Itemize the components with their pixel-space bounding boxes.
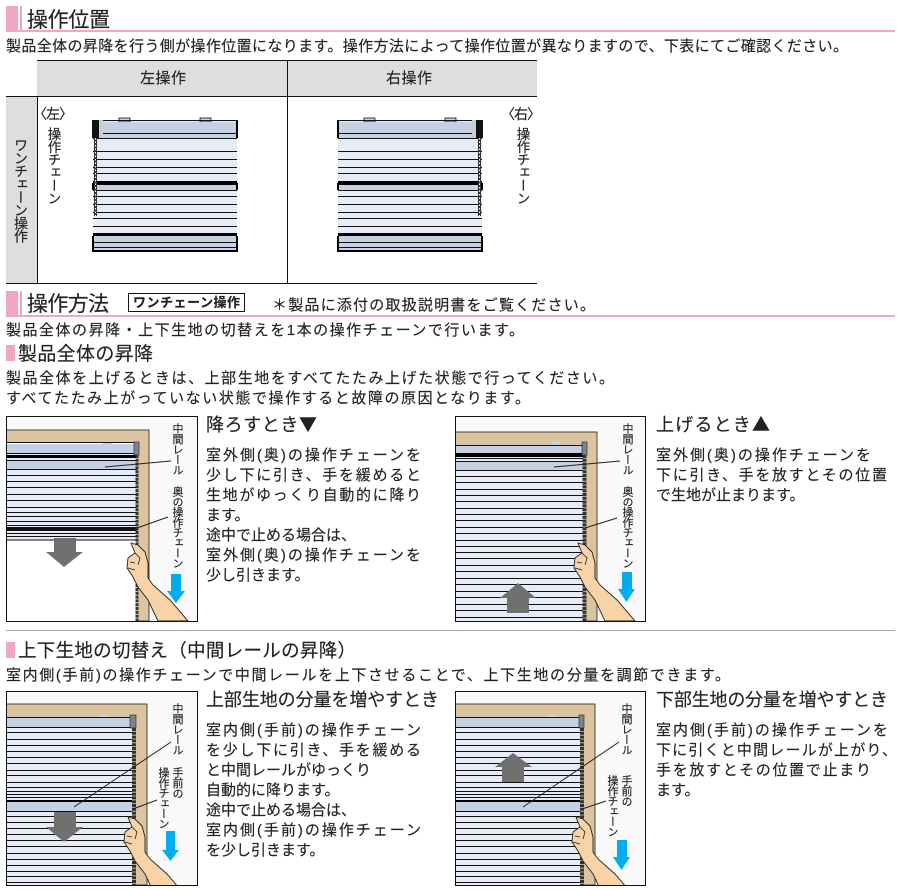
illustration: lowering [6,417,197,621]
subheading: 上下生地の切替え: 上下生地の切替え（中間レールの昇降） [18,640,356,661]
text block: raising: で生地が止まります。 [656,487,805,504]
illustration: increase lower fabric [456,703,632,885]
text: raising caution: すべてたたみ上がっていない状態で操作すると故障の原因となります。 [6,390,530,407]
table header: right: 右操作 [386,70,432,87]
text block: increase upper fabric: 上部生地の分量を増やすとき [206,690,439,710]
arrow: up gray [500,583,536,613]
text: raising caution [6,370,614,407]
illustration: raising [455,417,645,621]
text block: lowering: 生地がゆっくり自動的に降り [206,487,421,504]
hand [574,543,635,621]
text block: lowering: 途中で止める場合は、 [206,527,356,544]
text block: increase upper fabric [206,690,439,859]
text block: raising [656,411,887,504]
arrow: up gray [495,753,532,782]
text block: increase upper fabric: 自動的に降ります。 [206,782,340,799]
arrow: down gray [46,538,83,567]
arrow: down blue [162,831,179,861]
arrow: down gray [46,812,83,842]
label: rear chain: 奥の操作チェーン [621,485,634,568]
row label: one chain: ワンチェーン操作 [13,138,29,243]
heading: 操作位置: 操作位置 [27,9,110,32]
text block: increase upper fabric: 途中で止める場合は、 [206,802,356,819]
label: middle rail: 中間レール [171,423,184,475]
text: switching intro: 室内側(手前)の操作チェーンで中間レールを上下させることで、上下生地の分量を調節できます。 [6,667,730,684]
text block: increase lower fabric [656,690,897,799]
arrow: down blue [167,574,185,603]
text block: raising: 室外側(奥)の操作チェーンを [656,447,871,464]
diagram: left operated blind [92,118,238,252]
diagram: right operated blind [337,118,483,252]
table: operating position [6,60,540,284]
table header: left: 左操作 [140,70,186,87]
text block: increase upper fabric: と中間レールがゆっくり [206,762,371,779]
label: right chain: 操作チェーン [514,127,530,204]
text block: increase upper fabric: 室内側(手前)の操作チェーン [206,822,421,839]
label: middle rail: 中間レール [621,423,634,475]
label: middle rail: 中間レール [171,703,184,755]
badge: one chain operation: ワンチェーン操作 [133,295,240,310]
label: middle rail: 中間レール [620,703,632,755]
label: front: 手前の [171,766,184,798]
text block: lowering: ます。 [206,507,250,524]
label: rear chain: 奥の操作チェーン [171,485,184,568]
text block: lowering: 室外側(奥)の操作チェーンを [206,547,421,564]
text: raising caution: 製品全体を上げるときは、上部生地をすべてたたみ上げた状態で行ってください。 [6,370,614,387]
leader lines [523,742,619,809]
text block: lowering: 少し下に引き、手を緩めると [206,467,421,484]
leader lines [105,461,171,528]
text block: raising: 下に引き、手を放すとその位置 [656,467,887,484]
note: see manual: ＊製品に添付の取扱説明書をご覧ください。 [272,297,595,314]
leader lines [554,461,620,528]
text block: raising: 上げるとき▲ [656,411,770,437]
hand [124,816,177,885]
label: chain: 操作チェーン [157,766,170,828]
text block: increase lower fabric: 手を放すとその位置で止まり [656,762,871,779]
illustration: increase upper fabric [7,703,184,885]
text block: lowering: 降ろすとき▼ [206,411,317,437]
text: method intro: 製品全体の昇降・上下生地の切替えを1本の操作チェーンで行います。 [6,322,524,339]
heading: 操作方法: 操作方法 [27,293,109,316]
label: right: 〈右〉 [501,106,540,122]
heading: 操作位置 [6,6,895,32]
heading: 操作方法 [6,291,895,317]
label: chain: 操作チェーン [606,774,618,836]
leader lines [74,742,171,809]
text block: increase upper fabric: を少し下に引き、手を緩める [206,742,421,759]
arrow: down blue [618,572,635,602]
label: left: 〈左〉 [33,106,72,122]
label: left chain: 操作チェーン [46,127,61,204]
text block: increase lower fabric: 下に引くと中間レールが上がり、 [656,742,897,759]
text block: lowering [206,411,421,584]
text block: lowering: 室外側(奥)の操作チェーンを [206,447,421,464]
hand [572,816,625,885]
subheading: 製品全体の昇降: 製品全体の昇降 [18,343,153,365]
arrow: down blue [613,840,630,870]
hand [127,543,188,621]
text block: increase lower fabric: ます。 [656,782,700,799]
intro text: 操作位置: 製品全体の昇降を行う側が操作位置になります。操作方法によって操作位置が異なりますので、下表にてご確認ください。 [6,38,848,55]
text block: increase lower fabric: 室内側(手前)の操作チェーンを [656,722,888,739]
label: front: 手前の [620,774,632,806]
text block: increase upper fabric: 室内側(手前)の操作チェーン [206,722,421,739]
text block: increase upper fabric: を少し引きます。 [206,842,325,859]
text block: lowering: 少し引きます。 [206,567,310,584]
text block: increase lower fabric: 下部生地の分量を増やすとき [656,690,888,710]
